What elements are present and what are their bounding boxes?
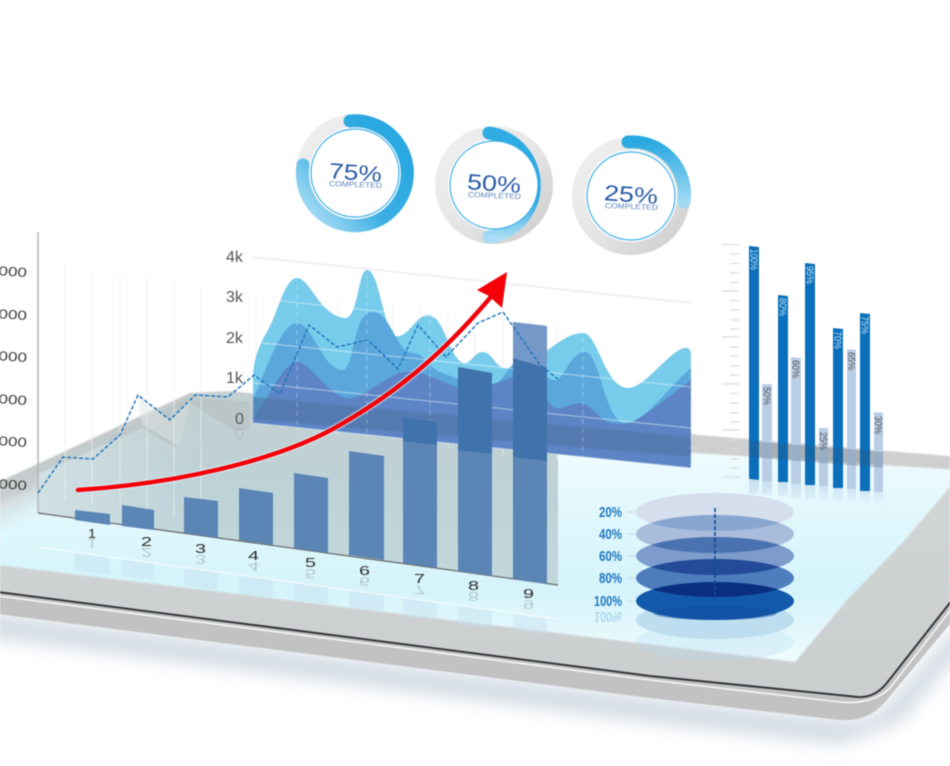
- area chart y-axis labels: 4k: [226, 249, 244, 266]
- bar 95%: [805, 263, 815, 485]
- disk labels: 100%: [594, 608, 622, 625]
- top bezel band: [235, 392, 950, 469]
- inner thin ring: [450, 141, 538, 229]
- bar overlap on area chart: [403, 358, 547, 461]
- reflected bar category labels: 9: [523, 597, 534, 612]
- bar category labels: 4: [248, 548, 259, 563]
- area chart y-axis labels: 0: [235, 424, 244, 441]
- bar value labels: 100%: [748, 249, 758, 270]
- bar category labels: [88, 526, 534, 601]
- ring caption: COMPLETED: [468, 190, 522, 201]
- area chart y-axis labels: 2k: [226, 330, 244, 347]
- bar reflections: [75, 553, 547, 634]
- bar category labels: 3: [195, 541, 206, 556]
- bar value labels: 70%: [832, 331, 842, 349]
- bar 65%: [847, 349, 856, 489]
- disk labels: [594, 504, 622, 625]
- bar reflections: [749, 480, 883, 506]
- area dashed verticals: [297, 275, 691, 468]
- ring caption: COMPLETED: [329, 179, 383, 190]
- disk reflections: [636, 601, 794, 639]
- inner thin ring: [587, 152, 675, 240]
- bar value labels: 75%: [858, 316, 870, 334]
- bar 1: [75, 510, 110, 525]
- progress ring: 75%: [302, 120, 408, 226]
- bar 25%: [819, 428, 828, 486]
- light blue area: [253, 270, 691, 468]
- disk labels: 80%: [599, 570, 622, 587]
- bar value labels: 25%: [817, 432, 828, 450]
- reflected bar category labels: 1: [88, 536, 96, 551]
- reflected bar category labels: [88, 536, 534, 612]
- bar value labels: 50%: [760, 387, 772, 405]
- area chart y-axis labels: 0: [235, 411, 244, 428]
- bar 7: [403, 417, 437, 568]
- bar 70%: [833, 328, 843, 488]
- disk 80%: [636, 559, 794, 597]
- reflected bar category labels: 2: [141, 545, 152, 560]
- disk 100%: [636, 582, 794, 620]
- bar value labels: 60%: [790, 360, 800, 378]
- panel facet: darker ridge: [38, 397, 250, 474]
- progress ring: 50%: [442, 132, 546, 238]
- bar 4: [239, 488, 273, 545]
- reflected bar category labels: 8: [468, 589, 479, 604]
- disk labels: 20%: [599, 504, 622, 521]
- bar category labels: 8: [468, 578, 479, 593]
- bar 80%: [778, 295, 788, 482]
- bar 9 top lighter: [513, 322, 547, 368]
- overlap 40-60: [651, 536, 779, 554]
- bar 3: [184, 497, 218, 538]
- tablet screen: [0, 414, 950, 662]
- arrow head: [477, 272, 507, 308]
- dashed center axis: [714, 508, 716, 602]
- area chart y-axis labels: 3k: [226, 289, 244, 306]
- main chart panel: [38, 232, 558, 585]
- stacked disks chart: [594, 493, 794, 661]
- 4k gridline: [253, 257, 691, 303]
- area chart: [253, 257, 691, 468]
- ring track: [442, 132, 546, 238]
- bezel band seen through areas: [253, 397, 691, 457]
- tablet dark edge line: [0, 590, 950, 697]
- ring progress arc: [489, 133, 534, 237]
- overlap 20-40: [651, 514, 778, 532]
- disk labels: 60%: [599, 548, 622, 565]
- disk 20%: [636, 493, 794, 531]
- bar value labels: 30%: [872, 416, 883, 434]
- bar category labels: 6: [359, 563, 370, 578]
- vertical percent bar chart: [722, 244, 883, 506]
- dashed trend line: [38, 312, 558, 493]
- tick scale: [722, 244, 739, 477]
- ring value: 25%: [603, 180, 659, 209]
- leader lines: [627, 512, 636, 601]
- bar value labels: 80%: [776, 298, 788, 316]
- bar 100%: [749, 246, 759, 480]
- overlap 80-100: [652, 582, 778, 598]
- reflected bar category labels: 4: [248, 559, 259, 574]
- arrow shaft: [78, 292, 495, 490]
- top-left bezel fade: [0, 391, 235, 545]
- ring value: 50%: [466, 169, 522, 198]
- ring progress arc: [302, 121, 407, 226]
- reflected bar category labels: 7: [414, 582, 425, 597]
- mid blue area: [253, 312, 691, 468]
- red growth arrow: [78, 272, 507, 490]
- tablet drop shadow: [0, 612, 950, 744]
- progress ring: 25%: [578, 142, 685, 248]
- panel lighter left fade: [38, 392, 558, 585]
- tablet bezel face: [0, 420, 950, 697]
- disk labels: 40%: [599, 526, 622, 543]
- reflected axis: [38, 547, 558, 619]
- ring track: [302, 120, 408, 226]
- bar category labels: 2: [141, 534, 152, 549]
- bar 30%: [874, 412, 883, 492]
- bottom axis: [38, 513, 558, 585]
- ring value: 75%: [328, 158, 383, 187]
- bar category labels: 7: [414, 571, 425, 586]
- disk inner shade: [653, 606, 777, 620]
- vertical grid lines: [65, 266, 557, 520]
- area horizontal gridlines: [253, 298, 691, 468]
- reflected bar category labels: 5: [305, 566, 316, 581]
- bar 75%: [860, 313, 870, 491]
- ring caption: COMPLETED: [605, 201, 659, 212]
- arrow glow: [78, 292, 495, 490]
- bar 50%: [762, 384, 772, 481]
- disk 40%: [636, 515, 794, 553]
- bar 2: [122, 505, 154, 530]
- ring track: [578, 144, 684, 248]
- chart backing panel: [38, 392, 558, 585]
- reflected bar category labels: 6: [359, 574, 370, 589]
- panel facet: lighter ridge: [138, 396, 192, 445]
- overlap 60-80: [651, 558, 779, 576]
- bar 5: [294, 473, 328, 553]
- bar category labels: 5: [305, 555, 316, 570]
- tablet device: [0, 391, 950, 744]
- tablet edge highlight: [0, 595, 950, 702]
- reflected bar category labels: 3: [195, 552, 206, 567]
- disk labels: 100%: [594, 593, 622, 610]
- tablet silver edge: [0, 590, 950, 720]
- bar category labels: 1: [88, 526, 96, 541]
- bar chart: [38, 322, 558, 634]
- dark blue area: [253, 362, 691, 468]
- area chart y-axis labels: 1k: [226, 370, 244, 387]
- bar 60%: [791, 357, 801, 484]
- ring progress arc: [628, 142, 685, 202]
- bar 6: [349, 451, 384, 560]
- bar value labels: 65%: [845, 352, 856, 370]
- area chart y-axis labels: [226, 249, 244, 441]
- inner thin ring: [311, 129, 399, 217]
- bar value labels: [748, 249, 883, 450]
- band shading across bars: [749, 441, 883, 468]
- bar category labels: 9: [523, 586, 534, 601]
- left axis: [37, 232, 39, 513]
- bar 9: [513, 322, 547, 584]
- disk 60%: [636, 537, 794, 575]
- left axis labels: [0, 262, 28, 493]
- bar value labels: 95%: [804, 266, 814, 284]
- disk reflection lower: [636, 623, 794, 661]
- bar 8: [458, 367, 492, 576]
